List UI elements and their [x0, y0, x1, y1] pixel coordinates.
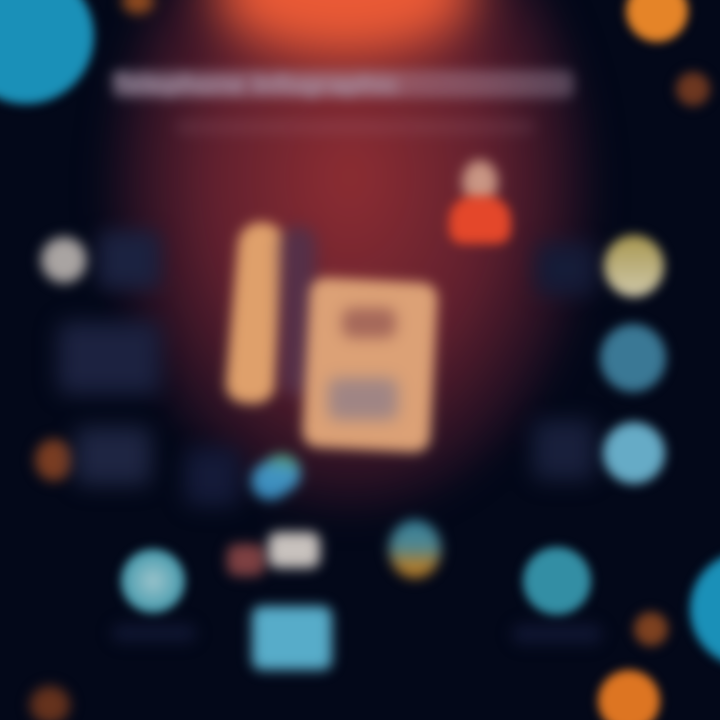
panel: red background glow: [110, 0, 590, 510]
text block: [536, 243, 596, 295]
panel: left column item 3: [27, 418, 160, 493]
telephone display: [342, 308, 396, 338]
telephone base: [302, 277, 438, 453]
person head: [462, 160, 498, 204]
text block under teal circle left: [112, 624, 196, 642]
text block: centre lower: [185, 448, 240, 506]
icon: orange circle: [35, 439, 73, 481]
icon: orange dot right: [676, 72, 710, 106]
icon: blue and orange circle: [389, 520, 441, 578]
icon: blue circle: [600, 324, 666, 392]
icon: teal circle right: [523, 547, 591, 615]
icon: teal circle left: [121, 549, 185, 613]
icon: red and white cards: [218, 522, 330, 584]
white card: [268, 532, 320, 568]
icon: pale circle: [41, 237, 87, 283]
icon: yellow-white circle: [604, 235, 664, 297]
icon: large blue circle right edge: [690, 552, 720, 666]
panel: top orange glow: [215, 0, 475, 55]
title: [112, 70, 574, 98]
text block: [533, 420, 595, 480]
icon: blue-green diagonal: [244, 447, 308, 507]
text block under teal circle right: [512, 624, 602, 644]
icon: telephone: [216, 214, 446, 462]
icon: light blue circle: [603, 422, 665, 484]
icon: orange circle top right: [626, 0, 688, 42]
handset shadow: [280, 226, 316, 396]
text block: [75, 427, 151, 485]
person body: [449, 196, 511, 244]
panel: right column item 1: [526, 227, 672, 306]
telephone handset: [224, 220, 290, 406]
red card: [227, 544, 265, 576]
icon: orange circle bottom right: [598, 670, 660, 720]
icon: sky blue box: [252, 606, 332, 670]
panel: right column item 2: [592, 316, 674, 400]
panel: left column item 1: [32, 224, 167, 296]
text block: [98, 231, 160, 289]
icon: person with red body: [441, 152, 520, 252]
subtitle: [175, 120, 535, 134]
icon: orange dot bottom left: [30, 686, 70, 720]
panel: right column item 3: [526, 412, 673, 492]
icon: large blue circle top left: [0, 0, 94, 104]
icon: orange dot lower right: [634, 612, 668, 646]
icon: orange dot top left: [122, 0, 154, 14]
telephone keypad: [328, 378, 398, 420]
panel: left column item 2 text: [58, 322, 160, 394]
